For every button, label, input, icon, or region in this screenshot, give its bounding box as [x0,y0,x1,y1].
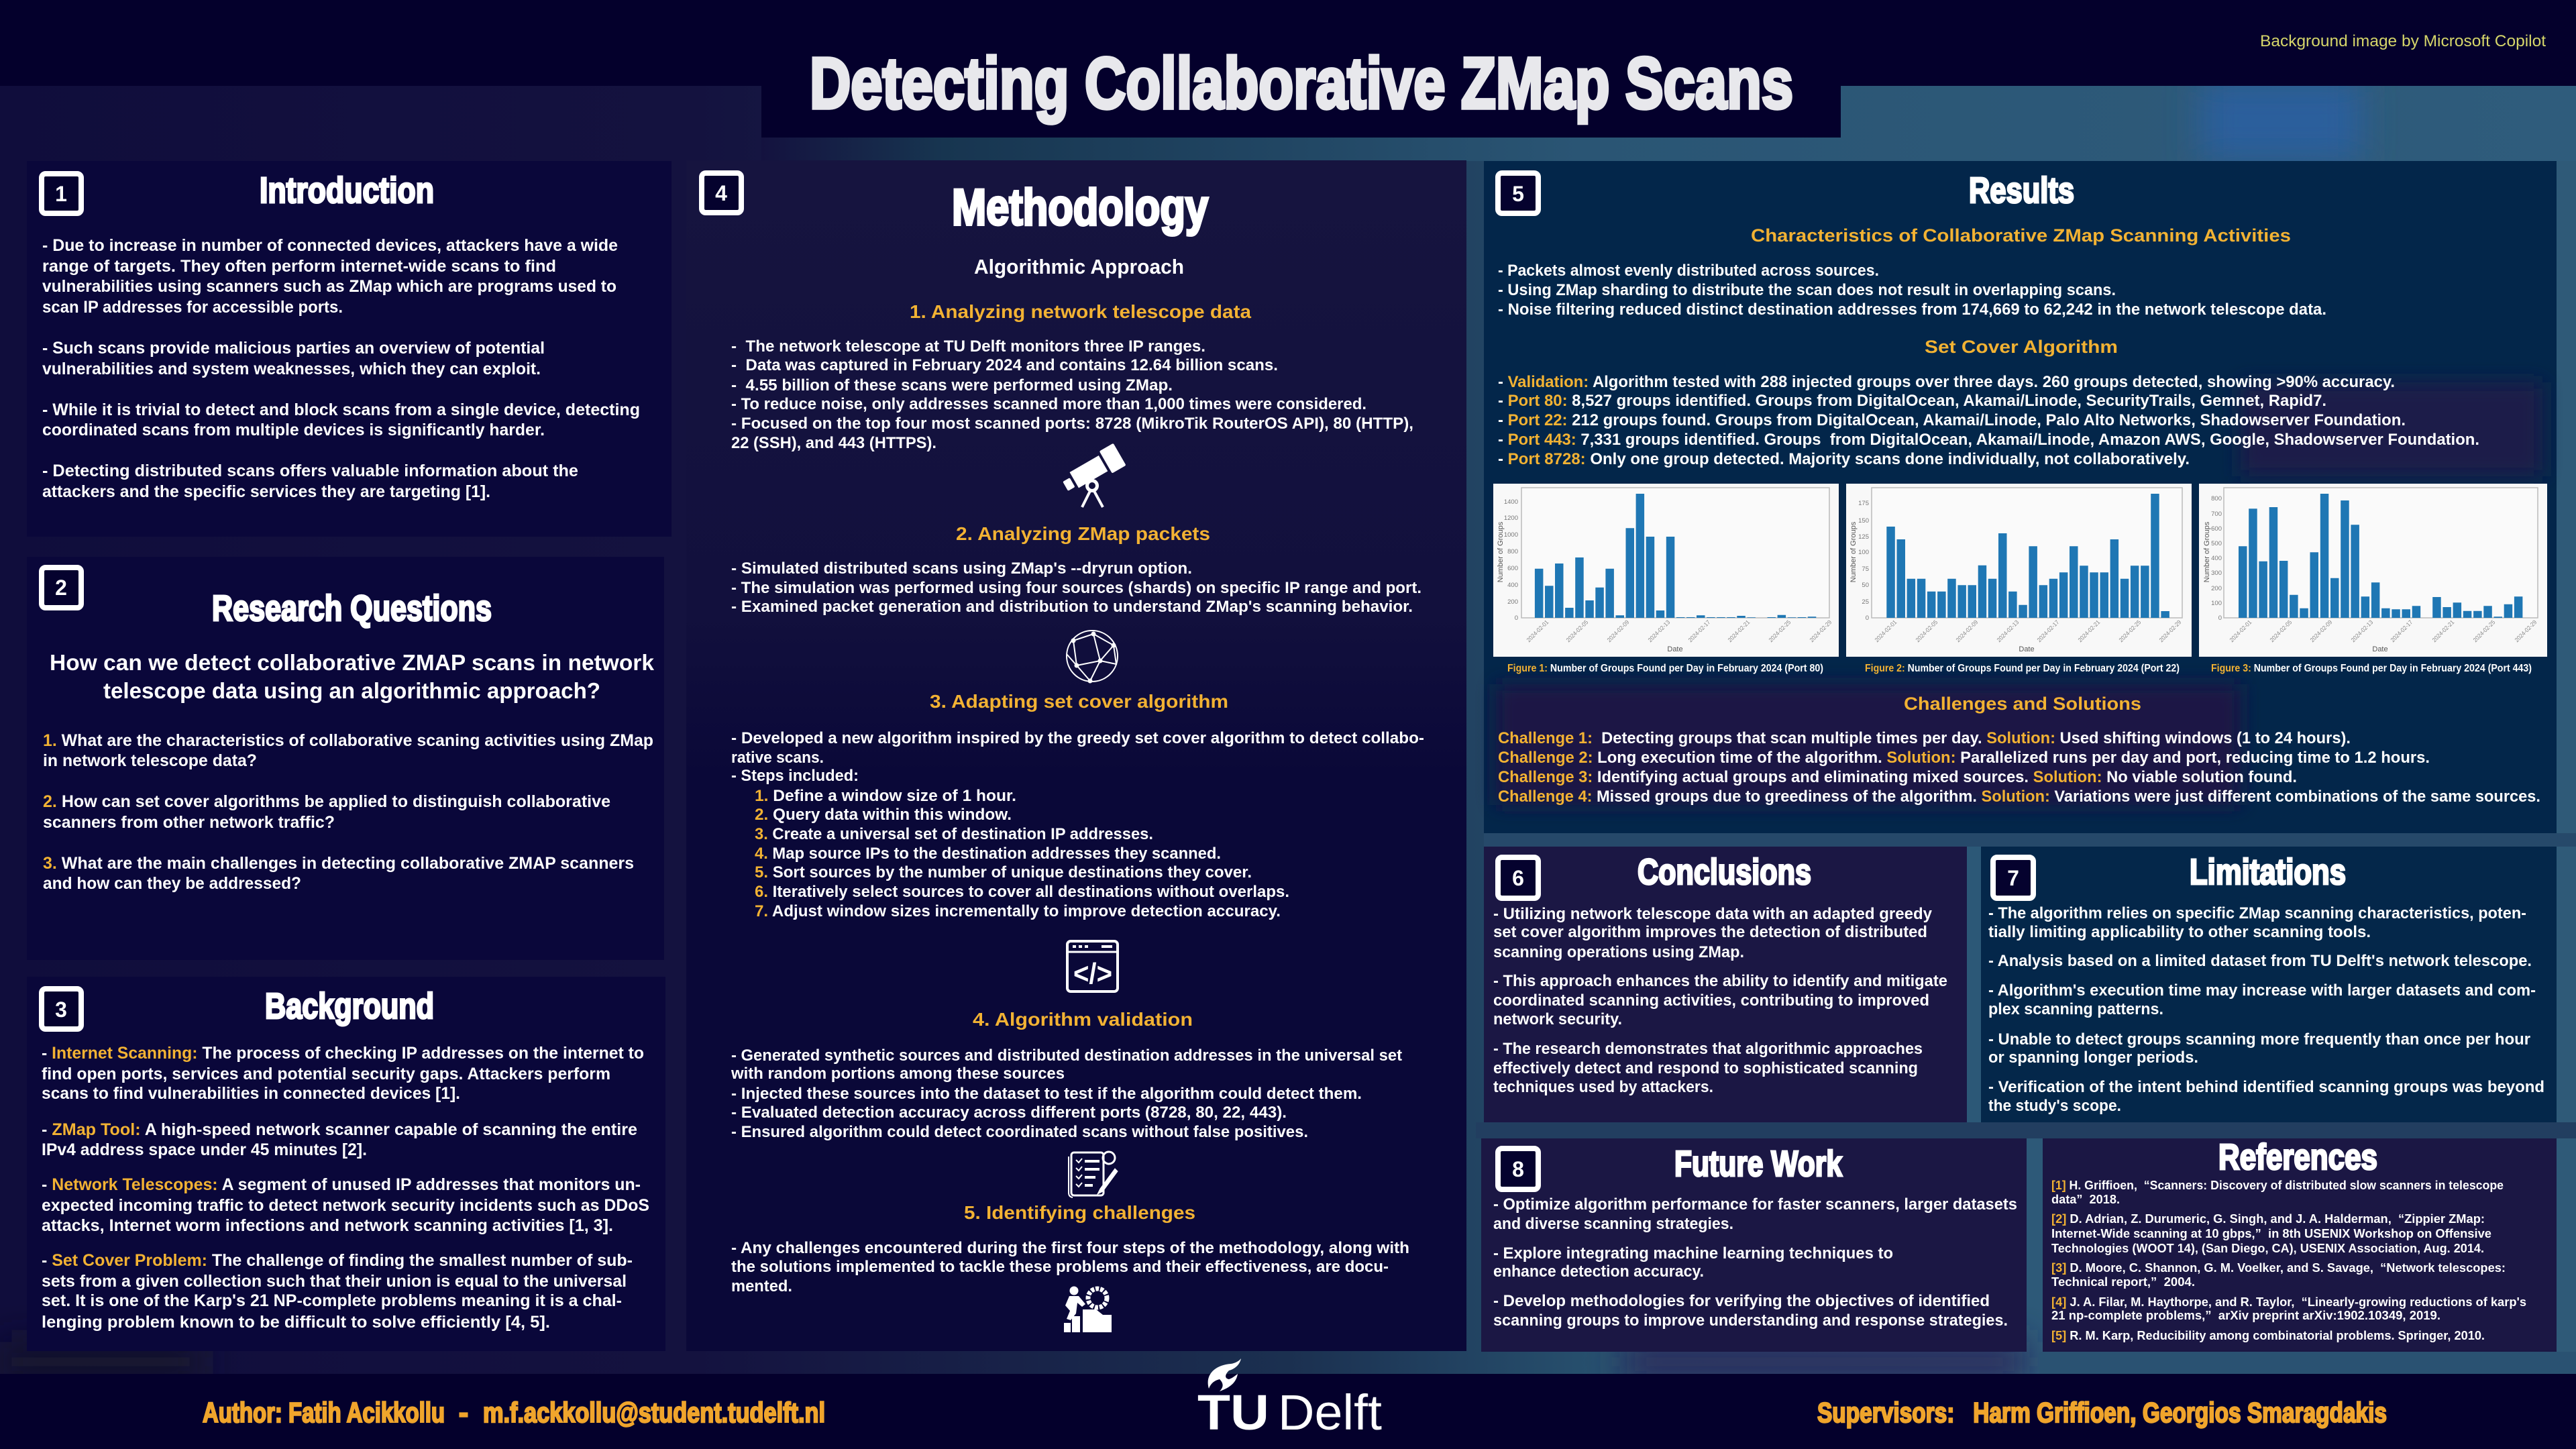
bar chart: port 22: 2024-02-13 [1996,619,2020,643]
bar chart: port 80: 200 [1507,598,1518,606]
conclusions text: set cover algorithm improves the detection of distributed [1493,923,1927,941]
heading: references: References [2218,1137,2377,1177]
step 2 text: - Examined packet generation and distribution to understand ZMap's scanning behavior. [731,598,1413,616]
footer: author: Author: Fatih Acikkollu [203,1397,445,1428]
heading: methodology: Methodology [952,179,1208,236]
panel: background [27,977,665,1351]
bar chart: port 22 [1846,484,2192,657]
conclusions text: coordinated scanning activities, contributing to improved [1493,991,1929,1010]
characteristics text: - Noise filtering reduced distinct destination addresses from 174,669 to 62,242 in the network telescope data. [1498,301,2326,319]
sub-questions: and how can they be addressed? [43,874,301,893]
reference list [2051,1179,2526,1342]
step 5 heading: 5. Identifying challenges [964,1202,1195,1223]
logo: TU Delft: Delft [1278,1385,1382,1440]
limitations text: or spanning longer periods. [1988,1049,2198,1067]
step 3 heading: 3. Adapting set cover algorithm [930,691,1228,712]
limitations text: plex scanning patterns. [1988,1000,2163,1018]
conclusions text: - Utilizing network telescope data with an adapted greedy [1493,905,1933,923]
logo: TU Delft: TU [1197,1385,1269,1440]
step 5 text: the solutions implemented to tackle these problems and their effectiveness, are docu- [731,1258,1389,1276]
section number 8: 8 [1512,1157,1524,1181]
bar chart: port 443: 2024-02-21 [2431,619,2455,643]
conclusions text: techniques used by attackers. [1493,1078,1713,1096]
step 2 text: - The simulation was performed using four sources (shards) on specific IP range and port. [731,579,1421,597]
section number 8 [1498,1148,1538,1189]
section number 2: 2 [55,576,67,600]
panel: limitations [1981,847,2557,1122]
icon: person climbing steps with gear [1064,1287,1112,1332]
challenges text: Challenge 4: Missed groups due to greediness of the algorithm. Solution: Variations were just different combinations of the same sources. [1498,788,2540,806]
bar chart: port 22: 2024-02-09 [1955,619,1979,643]
bar chart: port 443: 600 [2211,525,2222,533]
icon: code window: </> [1073,957,1112,990]
future work text: - Develop methodologies for verifying the objectives of identified [1493,1292,1990,1310]
bar chart: port 22: 2024-02-17 [2036,619,2060,643]
heading: future work: Future Work [1674,1144,1843,1184]
bar chart: port 443: 400 [2211,555,2222,562]
section number 7 [1993,857,2033,898]
heading: limitations: Limitations [2190,852,2346,892]
bar chart: port 443: Date [2372,645,2388,653]
step 3 text: 1. Define a window size of 1 hour. [755,787,1016,805]
bar chart: port 80: Date [1667,645,1683,653]
bar chart: port 443: 800 [2211,495,2222,502]
background text: IPv4 address space under 45 minutes [2]. [42,1140,367,1159]
section number 4 [702,173,741,213]
bar chart: port 443 [2199,484,2547,657]
background text: find open ports, services and potential security gaps. Attackers perform [42,1065,610,1083]
step 3 text: rative scans. [731,749,824,767]
introduction text: - Such scans provide malicious parties an overview of potential [42,339,545,358]
main research question: How can we detect collaborative ZMAP scans in network [50,650,655,675]
section number 6: 6 [1512,866,1524,890]
sub-questions: 1. What are the characteristics of collaborative scaning activities using ZMap [43,731,653,750]
footer: author: m.f.ackkollu@student.tudelft.nl [483,1397,825,1428]
subheading: algorithmic approach: Algorithmic Approach [974,255,1184,278]
heading: results: Results [1969,170,2074,211]
section number 6 [1498,857,1538,898]
limitations text: - Verification of the intent behind identified scanning groups was beyond [1988,1078,2544,1096]
bar chart: port 80: 1200 [1504,515,1518,522]
reference list: [3] D. Moore, C. Shannon, G. M. Voelker, and S. Savage, “Network telescopes: [2051,1261,2506,1275]
introduction text: - Due to increase in number of connected devices, attackers have a wide [42,236,618,255]
conclusions text: effectively detect and respond to sophisticated scanning [1493,1059,1918,1077]
footer: supervisors: Supervisors: Harm Griffioen, Georgios Smaragdakis [1817,1397,2387,1428]
section number 2 [42,568,81,608]
figure captions [1507,663,2532,674]
introduction text [42,236,640,501]
panel: future work [1481,1138,2027,1352]
subheading: set cover algorithm: Set Cover Algorithm [1925,337,2118,357]
panel: conclusions [1484,847,1967,1122]
panel: results [1484,161,2557,833]
title plate [761,0,1841,138]
step 1 text: 22 (SSH), and 443 (HTTPS). [731,434,936,452]
bar chart: port 80: 2024-02-21 [1727,619,1751,643]
introduction text: attackers and the specific services they are targeting [1]. [42,482,490,501]
introduction text: vulnerabilities and system weaknesses, which they can exploit. [42,360,541,378]
panel: introduction [27,161,672,537]
sub-questions: in network telescope data? [43,751,257,770]
bar chart: port 22: 100 [1858,549,1869,556]
characteristics text [1498,262,2326,319]
reference list: [5] R. M. Karp, Reducibility among combinatorial problems. Springer, 2010. [2051,1329,2485,1342]
reference list: 21 np-complete problems,” arXiv preprint arXiv:1902.10349, 2019. [2051,1309,2440,1322]
future work text [1493,1195,2017,1330]
step 1 text: - The network telescope at TU Delft monitors three IP ranges. [731,337,1205,356]
section number 5: 5 [1512,182,1524,206]
introduction text: vulnerabilities using scanners such as ZMap which are programs used to [42,277,616,296]
reference list: [1] H. Griffioen, “Scanners: Discovery of distributed slow scanners in telescope [2051,1179,2504,1192]
bar chart: port 22: Number of Groups [1849,521,1858,582]
section number 5 [1498,173,1538,213]
bar chart: port 22: 150 [1858,517,1869,525]
reference list: Technical report,” 2004. [2051,1275,2195,1289]
conclusions text: network security. [1493,1010,1622,1028]
step 4 text: - Ensured algorithm could detect coordinated scans without false positives. [731,1123,1308,1141]
step 2 text [731,559,1421,616]
subheading: challenges and solutions: Challenges and Solutions [1904,694,2141,714]
bar chart: port 80: 1400 [1504,498,1518,506]
limitations text: - Algorithm's execution time may increase with larger datasets and com- [1988,981,2536,1000]
step 3 text: 2. Query data within this window. [755,806,1012,824]
step 3 text: 6. Iteratively select sources to cover all destinations without overlaps. [755,883,1289,901]
bar chart: port 443: 2024-02-17 [2390,619,2414,643]
sub-questions: scanners from other network traffic? [43,813,335,832]
conclusions text: scanning operations using ZMap. [1493,943,1744,961]
step 1 heading: 1. Analyzing network telescope data [910,301,1251,322]
bar chart: port 80: Number of Groups [1497,521,1505,582]
step 3 text: - Developed a new algorithm inspired by the greedy set cover algorithm to detect collabo- [731,729,1424,747]
bar chart: port 80: 2024-02-09 [1606,619,1630,643]
step 4 text [731,1046,1402,1141]
panel: methodology [686,160,1466,1351]
bar chart: port 443: Number of Groups [2203,521,2211,582]
background text: sets from a given collection such that their union is equal to the universal [42,1272,627,1291]
bar chart: port 443: 700 [2211,511,2222,518]
future work text: scanning groups to improve understanding and response strategies. [1493,1311,2008,1330]
limitations text: - The algorithm relies on specific ZMap scanning characteristics, poten- [1988,904,2526,922]
bar chart: port 80: 400 [1507,582,1518,589]
background text: scans to find vulnerabilities in connected devices [1]. [42,1084,460,1103]
bar chart: port 80: 2024-02-01 [1525,619,1550,643]
bar chart: port 22: 2024-02-21 [2077,619,2101,643]
section number 3: 3 [55,998,67,1022]
section number 1 [42,174,81,213]
sub-questions [43,731,653,893]
introduction text: coordinated scans from multiple devices is significantly harder. [42,421,545,439]
challenges text: Challenge 3: Identifying actual groups and eliminating mixed sources. Solution: No viable solution found. [1498,768,2297,786]
bar chart: port 443: 2024-02-13 [2350,619,2374,643]
icon: network globe [1067,631,1118,683]
bar chart: port 80: 600 [1507,565,1518,572]
panel: references [2043,1137,2557,1352]
bar chart: port 443: 300 [2211,570,2222,577]
background text: lenging problem known to be difficult to solve efficiently [4, 5]. [42,1313,550,1332]
bar chart: port 22: 25 [1862,598,1869,606]
conclusions text: - This approach enhances the ability to identify and mitigate [1493,972,1947,990]
step 1 text: - Data was captured in February 2024 and contains 12.64 billion scans. [731,356,1278,374]
bar chart: port 443: 100 [2211,600,2222,607]
characteristics text: - Using ZMap sharding to distribute the scan does not result in overlapping scans. [1498,281,2116,299]
limitations text: - Analysis based on a limited dataset from TU Delft's network telescope. [1988,952,2532,970]
step 1 text: - Focused on the top four most scanned ports: 8728 (MikroTik RouterOS API), 80 (HTTP), [731,415,1413,433]
introduction text: scan IP addresses for accessible ports. [42,298,343,317]
bar chart: port 80: 2024-02-29 [1809,619,1833,643]
challenges text: Challenge 1: Detecting groups that scan multiple times per day. Solution: Used shifting windows (1 to 24 hours). [1498,729,2351,747]
bar chart: port 22: 50 [1862,582,1869,589]
limitations text: - Unable to detect groups scanning more frequently than once per hour [1988,1030,2530,1049]
bar chart: port 80: 800 [1507,548,1518,555]
step 3 text: - Steps included: [731,767,859,785]
challenges text: Challenge 2: Long execution time of the algorithm. Solution: Parallelized runs per day and port, reducing time to 1.2 hours. [1498,749,2430,767]
background text: - Set Cover Problem: The challenge of finding the smallest number of sub- [42,1251,633,1270]
background credit: Background image by Microsoft Copilot [2260,32,2546,50]
reference list: [4] J. A. Filar, M. Haythorpe, and R. Taylor, “Linearly-growing reductions of karp's [2051,1295,2526,1309]
sub-questions: 2. How can set cover algorithms be applied to distinguish collaborative [43,792,610,811]
future work text: - Explore integrating machine learning techniques to [1493,1244,1893,1263]
background text: expected incoming traffic to detect network security incidents such as DDoS [42,1196,649,1215]
bar chart: port 22: 175 [1858,500,1869,507]
set cover results text: - Validation: Algorithm tested with 288 injected groups over three days. 260 groups detected, showing >90% accuracy. [1498,373,2395,391]
bar chart: port 22: 2024-02-01 [1874,619,1898,643]
background text [42,1044,649,1332]
bar chart: port 80: 2024-02-17 [1687,619,1711,643]
section number 3 [42,989,81,1029]
bar chart: port 443: 0 [2218,614,2222,622]
step 2 heading: 2. Analyzing ZMap packets [956,523,1210,544]
panel: research questions [27,557,664,960]
bar chart: port 22: 125 [1858,533,1869,541]
subheading: characteristics: Characteristics of Collaborative ZMap Scanning Activities [1751,225,2291,246]
step 4 text: - Evaluated detection accuracy across different ports (8728, 80, 22, 443). [731,1104,1287,1122]
introduction text: - Detecting distributed scans offers valuable information about the [42,462,578,480]
step 3 text: 5. Sort sources by the number of unique destinations they cover. [755,863,1252,881]
sub-questions: 3. What are the main challenges in detecting collaborative ZMAP scanners [43,854,634,873]
bar chart: port 443: 2024-02-25 [2472,619,2496,643]
heading: introduction: Introduction [260,170,434,211]
limitations text: tially limiting applicability to other scanning tools. [1988,923,2371,941]
bar chart: port 22: 75 [1862,566,1869,573]
step 1 text: - To reduce noise, only addresses scanned more than 1,000 times were considered. [731,395,1366,413]
main research question: telescope data using an algorithmic approach? [103,678,600,703]
background text: attacks, Internet worm infections and network scanning activities [1, 3]. [42,1216,613,1235]
bar chart: port 443: 500 [2211,540,2222,547]
heading: background: Background [265,986,434,1026]
limitations text: the study's scope. [1988,1097,2121,1115]
bar chart: port 22: 2024-02-29 [2158,619,2182,643]
bar chart: port 443: 2024-02-09 [2309,619,2333,643]
step 3 text: 4. Map source IPs to the destination addresses they scanned. [755,845,1221,863]
set cover results text: - Port 8728: Only one group detected. Majority scans done individually, not collaboratively. [1498,450,2190,468]
bar chart: port 443: 2024-02-05 [2269,619,2293,643]
footer: author [203,1397,825,1428]
footer: author: - [459,1397,468,1428]
set cover results text [1498,373,2479,468]
reference list: data” 2018. [2051,1193,2120,1206]
introduction text: range of targets. They often perform internet-wide scans to find [42,257,556,276]
step 1 text [731,337,1413,452]
set cover results text: - Port 22: 212 groups found. Groups from DigitalOcean, Akamai/Linode, Palo Alto Networks, Shadowserver Foundation. [1498,411,2406,429]
title: Detecting Collaborative ZMap Scans [810,42,1793,123]
step 1 text: - 4.55 billion of these scans were performed using ZMap. [731,376,1173,394]
logo: TU Delft [1197,1358,1382,1440]
introduction text: - While it is trivial to detect and block scans from a single device, detecting [42,400,640,419]
background text: set. It is one of the Karp's 21 NP-complete problems meaning it is a chal- [42,1291,622,1310]
bar chart: port 443: 200 [2211,585,2222,592]
step 2 text: - Simulated distributed scans using ZMap's --dryrun option. [731,559,1192,578]
conclusions text: - The research demonstrates that algorithmic approaches [1493,1040,1923,1058]
bar chart: port 22: 2024-02-25 [2118,619,2142,643]
main research question [50,650,655,703]
future work text: enhance detection accuracy. [1493,1263,1704,1281]
limitations text [1988,904,2544,1115]
section number 4: 4 [715,181,727,205]
bar chart: port 22: 0 [1866,614,1869,622]
bar chart: port 80 [1493,484,1839,657]
bar chart: port 80: 2024-02-13 [1647,619,1671,643]
step 4 text: - Generated synthetic sources and distributed destination addresses in the universal set [731,1046,1402,1065]
step 5 text: - Any challenges encountered during the first four steps of the methodology, along with [731,1239,1409,1257]
bar chart: port 80: 1000 [1504,531,1518,539]
bar chart: port 80: 2024-02-05 [1565,619,1589,643]
bar chart: port 443: 2024-02-01 [2229,619,2253,643]
characteristics text: - Packets almost evenly distributed across sources. [1498,262,1879,280]
reference list: Internet-Wide scanning at 10 gbps,” in 8th USENIX Workshop on Offensive [2051,1227,2491,1240]
set cover results text: - Port 443: 7,331 groups identified. Groups from DigitalOcean, Akamai/Linode, Amazon AWS, Google, Shadowserver Foundation. [1498,431,2479,449]
figure captions: Figure 1: Number of Groups Found per Day in February 2024 (Port 80) [1507,663,1823,674]
figure captions: Figure 3: Number of Groups Found per Day in February 2024 (Port 443) [2211,663,2532,674]
bar chart: port 80: 0 [1515,614,1518,622]
conclusions text [1493,905,1947,1096]
set cover results text: - Port 80: 8,527 groups identified. Groups from DigitalOcean, Akamai/Linode, SecurityTrails, Gemnet, Rapid7. [1498,392,2326,410]
reference list: [2] D. Adrian, Z. Durumeric, G. Singh, and J. A. Halderman, “Zippier ZMap: [2051,1212,2485,1226]
bar chart: port 80: 2024-02-25 [1768,619,1792,643]
bar chart: port 443: 2024-02-29 [2514,619,2538,643]
future work text: and diverse scanning strategies. [1493,1215,1733,1233]
reference list: Technologies (WOOT 14), (San Diego, CA), USENIX Association, Aug. 2014. [2051,1242,2484,1255]
future work text: - Optimize algorithm performance for faster scanners, larger datasets [1493,1195,2017,1214]
icon: code window [1067,941,1118,991]
background text: - ZMap Tool: A high-speed network scanner capable of scanning the entire [42,1120,637,1139]
heading: research questions: Research Questions [212,588,492,629]
background text: - Network Telescopes: A segment of unused IP addresses that monitors un- [42,1175,641,1194]
step 4 text: - Injected these sources into the dataset to test if the algorithm could detect them. [731,1085,1362,1103]
bar chart: port 22: Date [2019,645,2035,653]
step 4 heading: 4. Algorithm validation [973,1009,1193,1030]
step 4 text: with random portions among these sources [731,1065,1065,1083]
figure captions: Figure 2: Number of Groups Found per Day in February 2024 (Port 22) [1865,663,2180,674]
bar chart: port 22: 2024-02-05 [1915,619,1939,643]
step 5 text: mented. [731,1277,792,1295]
background text: - Internet Scanning: The process of checking IP addresses on the internet to [42,1044,644,1063]
step 3 text [731,729,1424,920]
challenges text [1498,729,2540,806]
section number 7: 7 [2007,866,2019,890]
icon: telescope [1059,443,1126,507]
step 3 text: 7. Adjust window sizes incrementally to improve detection accuracy. [755,902,1281,920]
heading: conclusions: Conclusions [1638,852,1811,892]
step 3 text: 3. Create a universal set of destination IP addresses. [755,825,1153,843]
section number 1: 1 [55,182,67,206]
icon: checklist [1069,1152,1118,1197]
step 5 text [731,1239,1409,1295]
